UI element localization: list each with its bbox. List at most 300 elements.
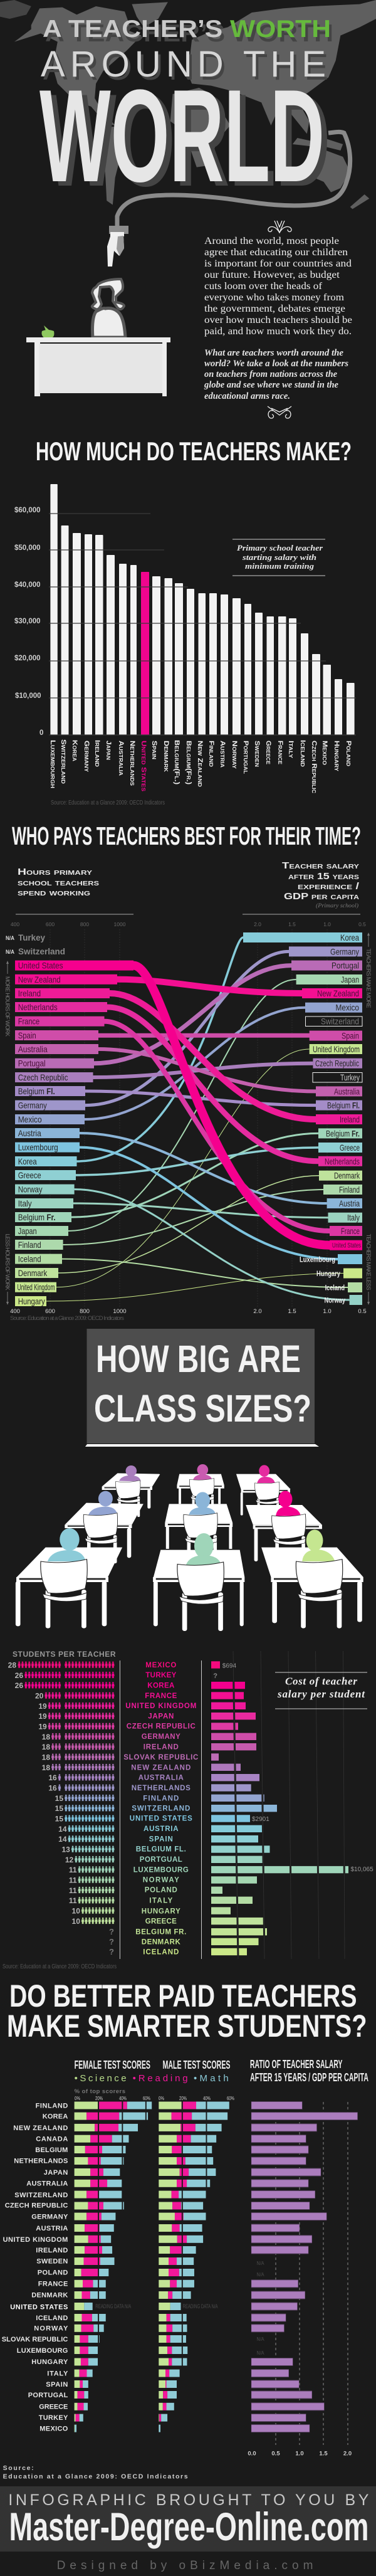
country names list: JAPAN <box>148 1713 174 1720</box>
country names list: PORTGUAL <box>140 1856 182 1864</box>
value labels: $2901 <box>252 1816 269 1823</box>
reading data unavailable notes <box>95 2303 218 2309</box>
pictogram counts: 18 <box>42 1753 50 1762</box>
country labels: United States <box>140 741 147 792</box>
callout: cost of teacher salary per student: Cost of teacher <box>285 1676 357 1687</box>
value labels <box>213 1663 373 1873</box>
ratio N/A labels: N/A <box>257 2271 264 2278</box>
country labels: Greece <box>264 741 272 765</box>
country labels for test scores: NEW ZEALAND <box>13 2125 68 2132</box>
country labels for test scores: CANADA <box>36 2136 68 2143</box>
right country bars: Austria <box>339 1198 360 1208</box>
ratio N/A labels: N/A <box>257 2336 264 2342</box>
y axis labels: $20,000 <box>14 655 41 662</box>
pictogram counts: ? <box>109 1927 114 1936</box>
callout: primary school teacher <box>232 539 325 576</box>
y axis labels: $60,000 <box>14 507 41 514</box>
scale labels: % of top scorers <box>75 2088 125 2095</box>
callout: cost of teacher salary per student: salary per student <box>277 1688 365 1700</box>
ratio axis labels: 1.0 <box>295 2451 304 2457</box>
pictogram counts: 12 <box>65 1855 74 1864</box>
country labels: Mexico <box>321 741 328 765</box>
column headers: FEMALE TEST SCORES <box>75 2059 150 2071</box>
left axis title: spend working <box>18 888 90 898</box>
right country bars: Turkey <box>340 1072 360 1082</box>
bar chart: ratio of teacher salary <box>248 2102 358 2457</box>
country labels: Hungary <box>333 741 340 772</box>
country labels for test scores: KOREA <box>43 2113 68 2121</box>
footer band <box>0 2486 376 2552</box>
pictogram counts: 18 <box>42 1733 50 1741</box>
right axis title: experience / <box>298 882 359 892</box>
right country bars <box>243 932 362 1305</box>
icon: teacher <box>92 279 125 337</box>
country labels: Spain <box>150 741 158 759</box>
bottom axis labels <box>10 1308 367 1315</box>
country labels for test scores: NORWAY <box>34 2325 68 2333</box>
country labels for test scores: ITALY <box>47 2370 68 2378</box>
pictogram counts <box>8 1660 114 1956</box>
country labels for test scores: HUNGARY <box>31 2358 68 2366</box>
right country bars: Norway <box>325 1296 345 1304</box>
scale labels: 0% <box>75 2096 80 2101</box>
pictogram counts: 11 <box>69 1876 77 1885</box>
back row, middle <box>177 1464 224 1515</box>
middle row, left <box>65 1491 144 1563</box>
right country bars: Iceland <box>325 1283 345 1292</box>
left country bars: Korea <box>18 1156 37 1166</box>
bottom axis labels: 1000 <box>113 1308 127 1315</box>
N/A labels <box>6 932 65 956</box>
left country bars: Ireland <box>18 988 41 998</box>
title line 2 shadow: AROUND THE <box>43 47 328 88</box>
title line 1: A TEACHER’S WORTH <box>43 16 331 43</box>
title <box>39 16 333 214</box>
country names list: SLOVAK REPUBLIC <box>123 1754 198 1761</box>
country labels: Netherlands <box>128 741 136 786</box>
intro paragraph: cuts loom over the heads of <box>204 281 323 292</box>
bar chart: cost per student <box>211 1651 373 1959</box>
bottom axis labels: 400 <box>10 1308 20 1315</box>
footer band: INFOGRAPHIC BROUGHT TO YOU BY <box>8 2491 369 2509</box>
scale labels: 0% <box>159 2096 164 2101</box>
right country bars: Japan <box>341 974 359 984</box>
pictogram counts: 18 <box>42 1743 50 1751</box>
country names list: DENMARK <box>142 1938 180 1946</box>
country labels: Portugal <box>242 741 249 774</box>
country labels for test scores: PORTUGAL <box>28 2392 68 2399</box>
middle row, right <box>246 1491 322 1565</box>
country names list: UNITED STATES <box>130 1815 192 1823</box>
country names list: NORWAY <box>143 1876 179 1884</box>
top axis labels <box>11 921 366 927</box>
right country bars: Italy <box>347 1213 360 1223</box>
y axis labels: $30,000 <box>14 618 41 625</box>
top axis labels: 1.0 <box>323 921 331 927</box>
country labels for test scores: SWITZERLAND <box>14 2192 68 2199</box>
intro question <box>204 348 348 401</box>
country labels for test scores: AUSTRALIA <box>26 2180 68 2187</box>
country labels: Switzerland <box>60 739 67 784</box>
right country bars: Belgium Fl. <box>327 1101 360 1111</box>
ratio N/A labels: N/A <box>257 2260 264 2266</box>
right country bars: Ireland <box>340 1114 360 1124</box>
pictogram right group <box>65 1660 115 1926</box>
left country bars: Denmark <box>18 1268 48 1278</box>
right country bars: Greece <box>340 1143 360 1153</box>
country labels for test scores: GERMANY <box>31 2214 68 2221</box>
country names list: TURKEY <box>145 1672 177 1679</box>
right country bars: Germany <box>330 946 359 956</box>
scale labels: 40% <box>119 2096 127 2101</box>
country labels: Finland <box>207 741 215 767</box>
left country bars: Belgium Fl. <box>18 1086 55 1096</box>
cost bars <box>211 1661 348 1955</box>
ratio axis labels: 2.0 <box>343 2451 352 2457</box>
chalkboard heading: CLASS SIZES? <box>94 1387 311 1430</box>
reading data unavailable notes: READING DATA N/A <box>183 2303 218 2309</box>
wire from title to hand <box>117 132 350 227</box>
left country bars: Norway <box>18 1185 43 1195</box>
scale labels <box>75 2088 234 2101</box>
legend <box>75 2073 229 2084</box>
country labels for test scores: SPAIN <box>46 2381 68 2389</box>
side labels and arrows: TEACHERS MAKE MORE <box>365 948 372 1008</box>
source note 3: Source: Education at a Glance 2009: OECD Indicators <box>3 1963 117 1970</box>
title line 2: AROUND THE <box>41 44 326 85</box>
country names list: BELGIUM FL. <box>136 1846 186 1854</box>
pictogram counts: 15 <box>55 1815 63 1824</box>
left country bars: Mexico <box>18 1114 42 1124</box>
pictogram counts: 26 <box>15 1681 23 1690</box>
legend: •Reading <box>133 2073 188 2084</box>
icon: bottom ornament <box>268 406 291 418</box>
pictogram counts: 16 <box>48 1773 57 1782</box>
top axis labels: 2.0 <box>254 921 261 927</box>
country names list: ICELAND <box>143 1949 179 1956</box>
country names list: LUXEMBOURG <box>133 1866 189 1874</box>
country names list: SPAIN <box>149 1836 173 1844</box>
bottom axis labels: 0.5 <box>358 1308 367 1315</box>
intro question: What are teachers worth around the <box>204 348 343 358</box>
left country bars: Japan <box>18 1226 37 1236</box>
country labels: Ireland <box>93 740 101 767</box>
intro paragraph <box>204 236 352 337</box>
country labels <box>49 739 352 793</box>
left country bars: New Zealand <box>18 974 61 984</box>
designer credit: Designed by oBizMedia.com <box>57 2559 313 2572</box>
legend: •Science <box>75 2073 127 2084</box>
pictogram counts: 16 <box>48 1783 57 1792</box>
intro question: on teachers from nations across the <box>204 369 337 379</box>
front row, left <box>16 1528 122 1628</box>
country labels for test scores: BELGIUM <box>35 2146 68 2154</box>
right axis title: Teacher salary <box>282 861 359 871</box>
back row, left <box>102 1465 160 1517</box>
country labels for test scores: JAPAN <box>44 2169 68 2177</box>
back row, right <box>236 1465 291 1518</box>
right country bars: France <box>341 1226 360 1236</box>
country labels for test scores: POLAND <box>38 2269 68 2276</box>
country names list: ITALY <box>149 1897 173 1904</box>
right country bars: New Zealand <box>317 988 359 998</box>
country labels: France <box>276 741 284 765</box>
country names list: NETHERLANDS <box>132 1785 191 1792</box>
left country bars: Italy <box>18 1198 32 1208</box>
country labels: Sweden <box>253 741 261 767</box>
intro paragraph: agree that educating our children <box>204 247 348 258</box>
scale labels: 20% <box>95 2096 103 2101</box>
y axis labels <box>14 507 43 737</box>
country labels: Denmark <box>162 741 170 772</box>
left axis title: school teachers <box>18 878 99 888</box>
intro question: globe and see where we stand in the <box>204 380 338 390</box>
world map background <box>0 0 376 209</box>
y axis labels: $40,000 <box>14 581 41 589</box>
country labels: Italy <box>287 741 295 759</box>
right axis title: after 15 years <box>288 872 359 882</box>
pictogram counts: 10 <box>72 1917 80 1926</box>
pictogram counts: 19 <box>38 1702 47 1711</box>
intro paragraph: Around the world, most people <box>204 236 339 246</box>
value labels: $10,065 <box>351 1866 373 1873</box>
bars <box>50 484 355 735</box>
country labels for test scores <box>2 2102 68 2433</box>
right axis title: GDP per capita <box>284 892 359 902</box>
ratio axis labels: 1.5 <box>319 2451 328 2457</box>
left country bars: Portugal <box>18 1058 46 1069</box>
bottom axis labels: 1.5 <box>288 1308 296 1315</box>
country labels: Luxembourgh <box>49 740 56 788</box>
right country bars: Luxembourg <box>300 1255 335 1264</box>
country labels for test scores: MEXICO <box>39 2426 68 2433</box>
reading data unavailable notes: READING DATA N/A <box>95 2303 131 2309</box>
top axis labels: 1.5 <box>288 921 296 927</box>
ratio bars <box>251 2102 358 2432</box>
right country bars: Spain <box>342 1031 359 1041</box>
icon: top ornament <box>268 221 291 233</box>
bottom axis labels: 1.0 <box>323 1308 332 1315</box>
N/A labels: N/A <box>6 935 14 941</box>
side labels and arrows: TEACHERS MAKE LESS <box>365 1234 372 1291</box>
country labels for test scores: LUXEMBOURG <box>17 2347 68 2355</box>
N/A labels: Turkey <box>18 932 45 942</box>
left country bars: Netherlands <box>18 1002 58 1012</box>
source note 4: Education at a Glance 2009: OECD Indicators <box>3 2473 188 2481</box>
pictogram counts: 11 <box>69 1866 77 1874</box>
source note 4: Source: <box>3 2464 34 2472</box>
country labels for test scores: UNITED STATES <box>10 2304 68 2311</box>
country labels: Czech Republic <box>310 741 318 793</box>
classroom desks and students <box>16 1464 363 1631</box>
right country bars: Finland <box>339 1185 360 1195</box>
slope chart: hours vs salary <box>4 914 372 1315</box>
pictogram counts: 20 <box>35 1692 44 1701</box>
ratio axis labels: 0.0 <box>248 2451 256 2457</box>
legend: •Math <box>194 2073 229 2084</box>
pictogram counts: 14 <box>58 1825 67 1834</box>
desk <box>26 337 170 396</box>
ratio axis labels <box>248 2451 352 2457</box>
column headers <box>75 2058 368 2084</box>
left country bars: Luxembourg <box>18 1143 58 1153</box>
left country bars: United States <box>18 961 63 971</box>
left country bars: Austria <box>18 1128 41 1138</box>
right country bars: Czech Republic <box>315 1058 359 1069</box>
country names list: AUSTRIA <box>144 1825 179 1833</box>
country labels for test scores: DENMARK <box>31 2291 68 2299</box>
right axis title: (Primary school) <box>316 902 358 909</box>
country labels: Korea <box>71 740 78 761</box>
pictogram counts: 28 <box>8 1660 16 1669</box>
country labels for test scores: AUSTRIA <box>36 2225 68 2232</box>
callout: primary school teacher: Primary school teacher <box>237 543 323 552</box>
pictogram counts: 19 <box>38 1722 47 1731</box>
intro paragraph: over how much teachers should be <box>204 315 352 325</box>
front row, middle <box>153 1533 244 1631</box>
intro paragraph: paid, and how much work they do. <box>204 326 352 337</box>
N/A labels: N/A <box>6 949 14 955</box>
country labels for test scores: FRANCE <box>38 2280 68 2288</box>
country labels: Australia <box>117 741 125 776</box>
callout: primary school teacher: minimum training <box>245 561 315 571</box>
right country bars: Portugal <box>332 961 359 971</box>
bottom axis labels: 800 <box>80 1308 90 1315</box>
pictogram counts: 19 <box>38 1712 47 1721</box>
left country bars: Finland <box>18 1240 41 1250</box>
y axis labels: $50,000 <box>14 544 41 552</box>
source note 1: Source: Education at a Glance 2009: OECD Indicators <box>51 800 165 806</box>
pictogram counts: 10 <box>72 1906 80 1915</box>
country labels: Belgium(Fl.) <box>173 740 180 784</box>
pictogram counts: 13 <box>61 1845 70 1854</box>
side labels and arrows: LESS HOURS OF WORK <box>4 1234 11 1291</box>
intro question: world? We take a look at the numbers <box>204 359 348 369</box>
intro paragraph: our future. However, as budget <box>204 270 340 280</box>
country labels: Norway <box>231 741 238 769</box>
intro question: educational arms race. <box>204 391 290 401</box>
country names list: KOREA <box>147 1682 174 1690</box>
intro paragraph: the government, debates emerge <box>204 304 345 314</box>
left country bars: Australia <box>18 1044 48 1054</box>
right country bars: Mexico <box>336 1003 359 1013</box>
pictogram counts: 15 <box>55 1804 63 1813</box>
country names list: FRANCE <box>145 1692 177 1700</box>
curves <box>46 937 350 1301</box>
left country bars <box>15 961 133 1306</box>
right country bars: United Kingdom <box>313 1044 360 1054</box>
front row, right <box>261 1529 363 1628</box>
top axis labels: 800 <box>80 921 89 927</box>
left country bars: United Kingdom <box>18 1282 55 1292</box>
left country bars: Germany <box>18 1101 47 1111</box>
right country bars: Switzerland <box>321 1016 359 1027</box>
ratio axis labels: 0.5 <box>271 2451 280 2457</box>
country labels for test scores: SWEDEN <box>36 2257 68 2265</box>
left country bars: Belgium Fr. <box>18 1212 56 1222</box>
pictogram counts: 14 <box>58 1835 67 1844</box>
callout: cost of teacher salary per student <box>275 1672 367 1709</box>
pictogram left group <box>18 1660 61 1793</box>
country labels for test scores: TURKEY <box>39 2414 68 2422</box>
scale labels: 60% <box>143 2096 150 2101</box>
country labels for test scores: CZECH REPUBLIC <box>5 2202 68 2210</box>
country names list: BELGIUM FR. <box>135 1929 186 1936</box>
value labels: $694 <box>222 1663 236 1669</box>
bottom axis labels: 2.0 <box>253 1308 262 1315</box>
right country bars: Australia <box>334 1086 360 1096</box>
left axis title <box>18 867 99 898</box>
intro paragraph: is important for our countries and <box>204 258 352 269</box>
country names list <box>123 1662 198 1956</box>
icon: apple <box>41 325 54 339</box>
icon: pointing hand <box>107 226 128 267</box>
country labels: Germany <box>83 741 90 773</box>
left country bars: France <box>18 1016 39 1027</box>
right country bars: Netherlands <box>325 1156 360 1166</box>
left country bars: Iceland <box>18 1254 41 1264</box>
y axis labels: $10,000 <box>15 692 41 700</box>
stacked bars: female and male test scores <box>75 2101 229 2433</box>
country labels for test scores: IRELAND <box>36 2247 68 2254</box>
left country bars: Spain <box>18 1030 36 1040</box>
pictogram counts: ? <box>109 1937 114 1946</box>
scale labels: 60% <box>227 2096 234 2101</box>
top axis labels: 1000 <box>114 921 126 927</box>
left country bars: Czech Republic <box>18 1072 68 1082</box>
scale labels: 20% <box>179 2096 187 2101</box>
country labels for test scores: UNITED KINGDOM <box>3 2236 68 2244</box>
left country bars: Hungary <box>18 1296 45 1306</box>
country names list: FINLAND <box>143 1795 179 1802</box>
country names list: IRELAND <box>144 1743 179 1751</box>
column headers: MALE TEST SCORES <box>163 2059 231 2071</box>
country labels for test scores: ICELAND <box>36 2315 68 2322</box>
country labels for test scores: GREECE <box>39 2403 68 2410</box>
country labels for test scores: NETHERLANDS <box>14 2157 68 2165</box>
side labels and arrows <box>4 932 372 1305</box>
right country bars: United States <box>332 1242 361 1249</box>
country names list: AUSTRALIA <box>138 1775 184 1782</box>
scale labels: 40% <box>203 2096 211 2101</box>
right country bars: Korea <box>340 932 359 942</box>
country labels: Iceland <box>299 740 306 767</box>
right country bars: Denmark <box>334 1171 360 1181</box>
country labels: Poland <box>345 741 352 766</box>
country names list: CZECH REPUBLIC <box>127 1723 196 1731</box>
right axis title <box>282 861 359 909</box>
y axis labels: 0 <box>39 729 43 737</box>
top axis labels: 600 <box>46 921 55 927</box>
country labels for test scores: FINLAND <box>36 2102 68 2109</box>
bar chart: starting salaries <box>14 484 356 793</box>
chalkboard heading: HOW BIG ARE <box>96 1338 301 1380</box>
source note 2: Source: Education at a Glance 2009: OECD Indicators <box>10 1315 124 1322</box>
chalkboard heading <box>85 1329 319 1447</box>
ratio N/A labels: N/A <box>257 2350 264 2356</box>
pictogram: students per teacher <box>8 1660 202 1959</box>
source note 4 <box>3 2464 188 2481</box>
ratio N/A labels <box>257 2260 264 2356</box>
pictogram counts: 11 <box>69 1896 77 1905</box>
right country bars: Hungary <box>316 1269 340 1278</box>
title line 1 shadow: A TEACHER’S WORTH <box>45 20 333 47</box>
N/A labels: Switzerland <box>18 946 65 956</box>
country names list: HUNGARY <box>142 1908 180 1915</box>
callout: primary school teacher: starting salary with <box>242 552 316 562</box>
intro paragraph: everyone who takes money from <box>204 292 344 303</box>
side labels and arrows: MORE HOURS OF WORK <box>4 976 11 1037</box>
